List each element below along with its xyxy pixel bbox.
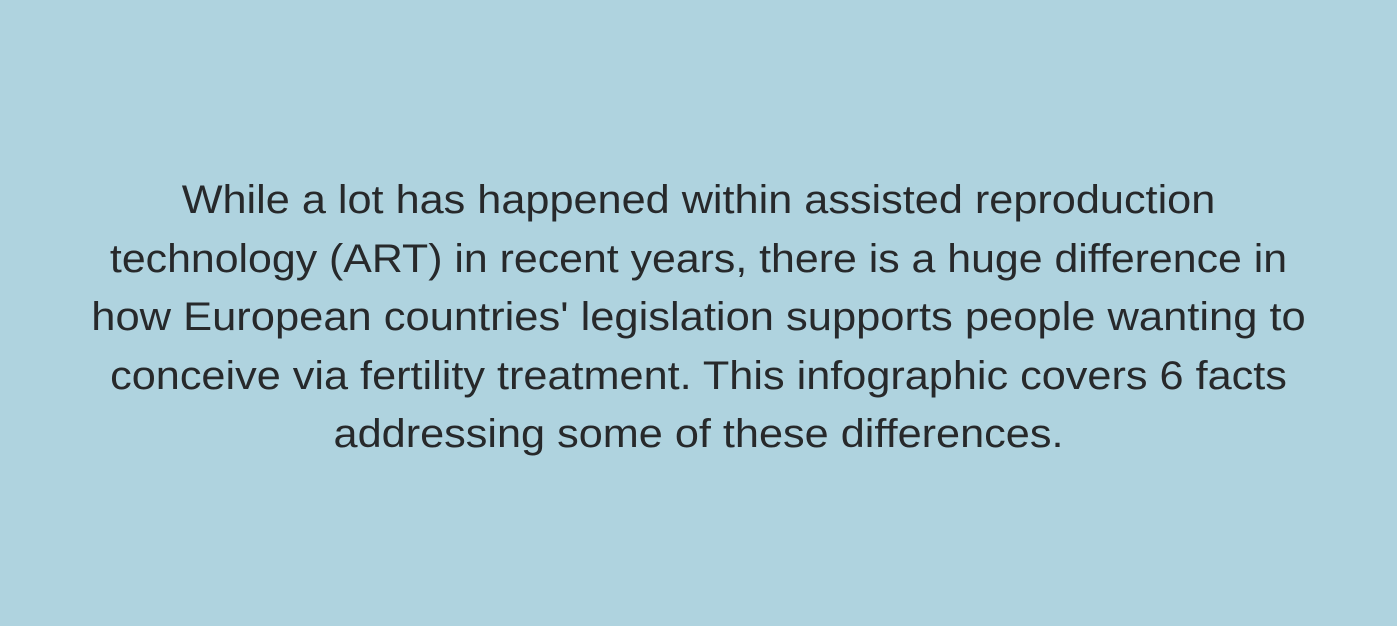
intro text block [91, 178, 1306, 456]
intro text block: conceive via fertility treatment. This infographic covers 6 facts [110, 354, 1287, 398]
intro text block: how European countries' legislation supports people wanting to [91, 295, 1306, 339]
intro text block: technology (ART) in recent years, there is a huge difference in [110, 236, 1287, 280]
intro text block: While a lot has happened within assisted reproduction [182, 178, 1215, 222]
intro text block: addressing some of these differences. [334, 412, 1063, 456]
